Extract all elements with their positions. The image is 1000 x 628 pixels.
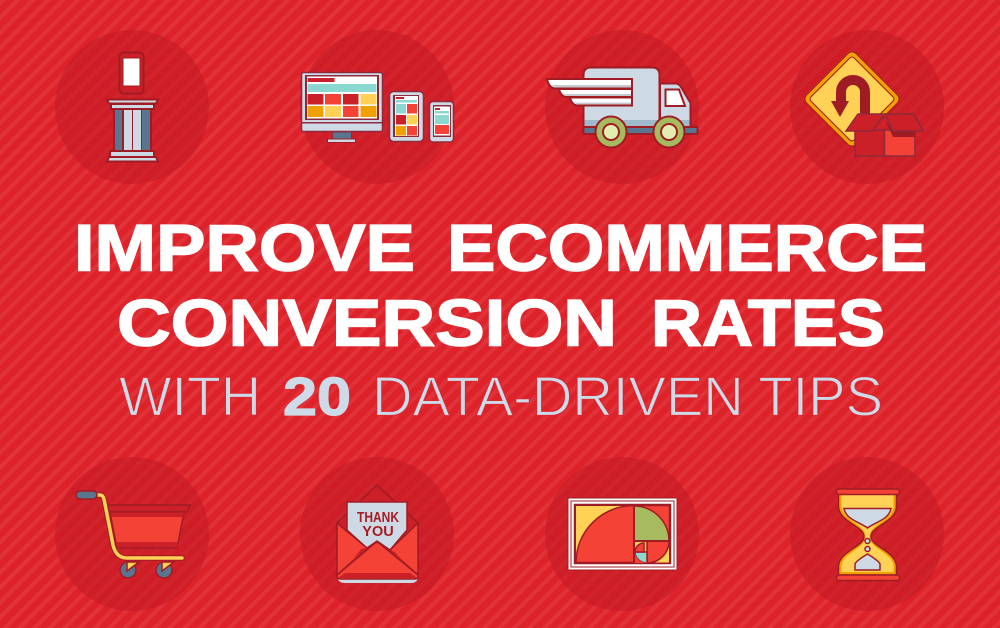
subtitle: WITH xyxy=(119,364,261,428)
icon: thank you envelope xyxy=(337,485,418,583)
icon: phone on podium xyxy=(107,52,158,162)
title: CONVERSION xyxy=(117,286,617,360)
icon: delivery truck xyxy=(547,68,698,148)
icon: golden ratio frame xyxy=(568,498,677,570)
subtitle xyxy=(119,364,883,428)
text: thank you: THANK xyxy=(357,510,399,526)
title: ECOMMERCE xyxy=(447,210,927,284)
icon: u-turn sign and box xyxy=(803,50,923,156)
icon: shopping cart xyxy=(76,491,190,578)
icon: thank you envelope: YOU xyxy=(362,524,394,540)
subtitle: DATA-DRIVEN TIPS xyxy=(372,364,883,428)
icon: responsive devices xyxy=(302,72,454,142)
subtitle: 20 xyxy=(283,367,351,427)
icon: hourglass xyxy=(836,489,900,580)
title xyxy=(74,210,927,360)
title: IMPROVE xyxy=(74,210,415,284)
title: RATES xyxy=(651,286,885,360)
